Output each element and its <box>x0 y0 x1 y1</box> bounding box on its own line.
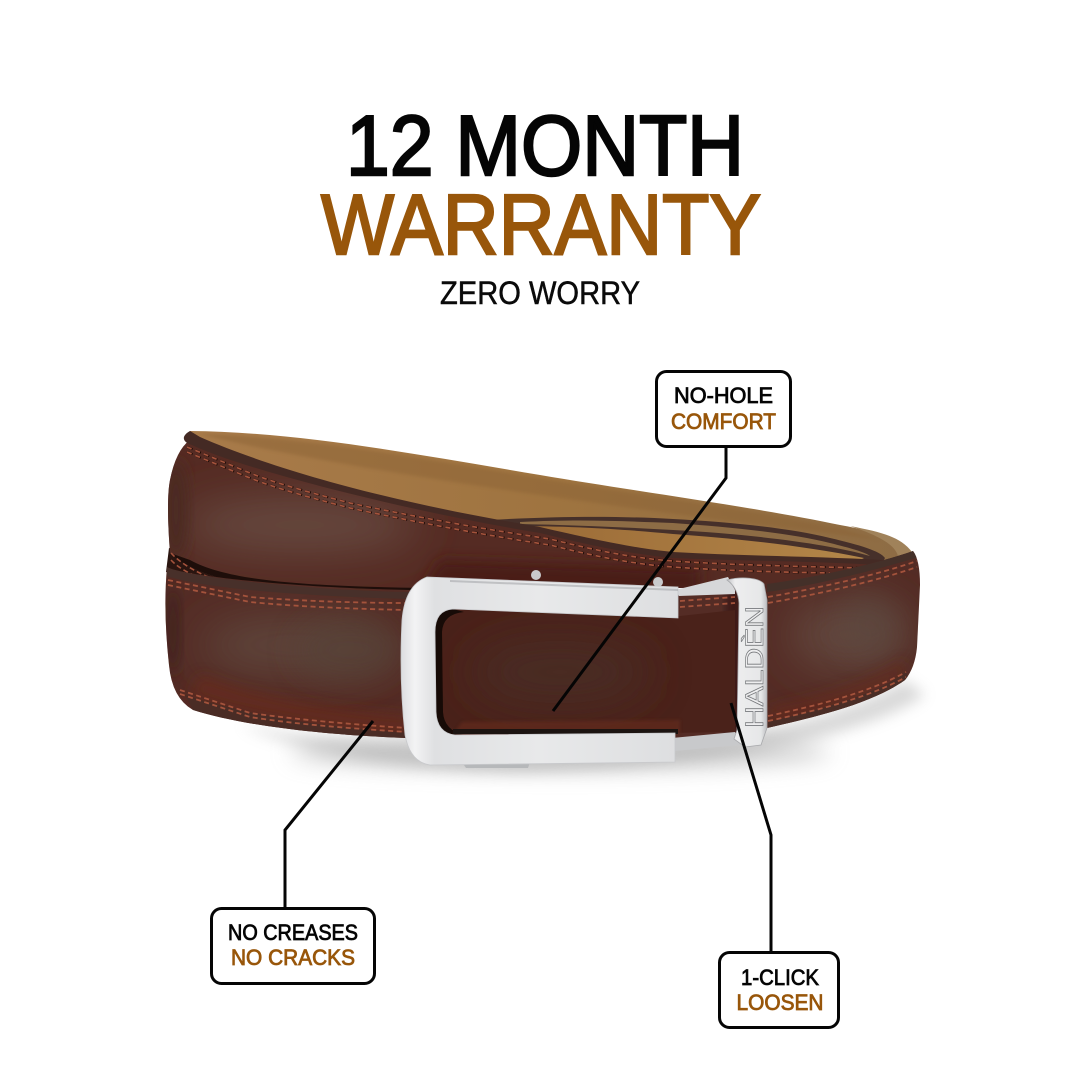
callout: 1-click loosen <box>720 952 838 1028</box>
stitching <box>171 447 860 582</box>
leader line: 1-click loosen <box>731 703 771 952</box>
buckle <box>401 570 740 768</box>
heading: warranty: WARRANTY <box>321 178 761 273</box>
callout: 1-click loosen: 1-CLICK <box>741 965 819 990</box>
strap seen through buckle <box>433 608 735 736</box>
callout: 1-click loosen: LOOSEN <box>736 990 824 1015</box>
belt inner lining <box>190 431 916 576</box>
band join shadow <box>166 548 225 590</box>
heading: 12 month: 12 MONTH <box>346 99 744 194</box>
callout: no creases no cracks: NO CRACKS <box>231 945 355 970</box>
buckle frame <box>401 577 678 765</box>
rims <box>167 567 410 599</box>
callout: no-hole comfort: COMFORT <box>671 409 776 434</box>
title <box>321 99 761 311</box>
brand text: HALDÈN <box>740 606 769 728</box>
lower band stitching <box>168 561 917 732</box>
belt ground shadow <box>240 680 925 772</box>
belt loop with brand <box>727 578 769 747</box>
upper belt band <box>164 431 884 594</box>
coiled strap end <box>490 517 885 576</box>
leader line: no-hole comfort <box>553 446 726 711</box>
subtitle: zero worry: ZERO WORRY <box>440 275 640 311</box>
callout: no-hole comfort: NO-HOLE <box>674 383 773 408</box>
callout: no-hole comfort <box>656 372 790 446</box>
lower belt band <box>165 550 922 742</box>
leader line: no creases <box>285 721 373 908</box>
callout: no creases no cracks <box>212 908 374 984</box>
callout: no creases no cracks: NO CREASES <box>228 920 358 945</box>
rim <box>184 431 884 565</box>
belt illustration <box>164 431 925 772</box>
buckle pins <box>531 570 541 580</box>
